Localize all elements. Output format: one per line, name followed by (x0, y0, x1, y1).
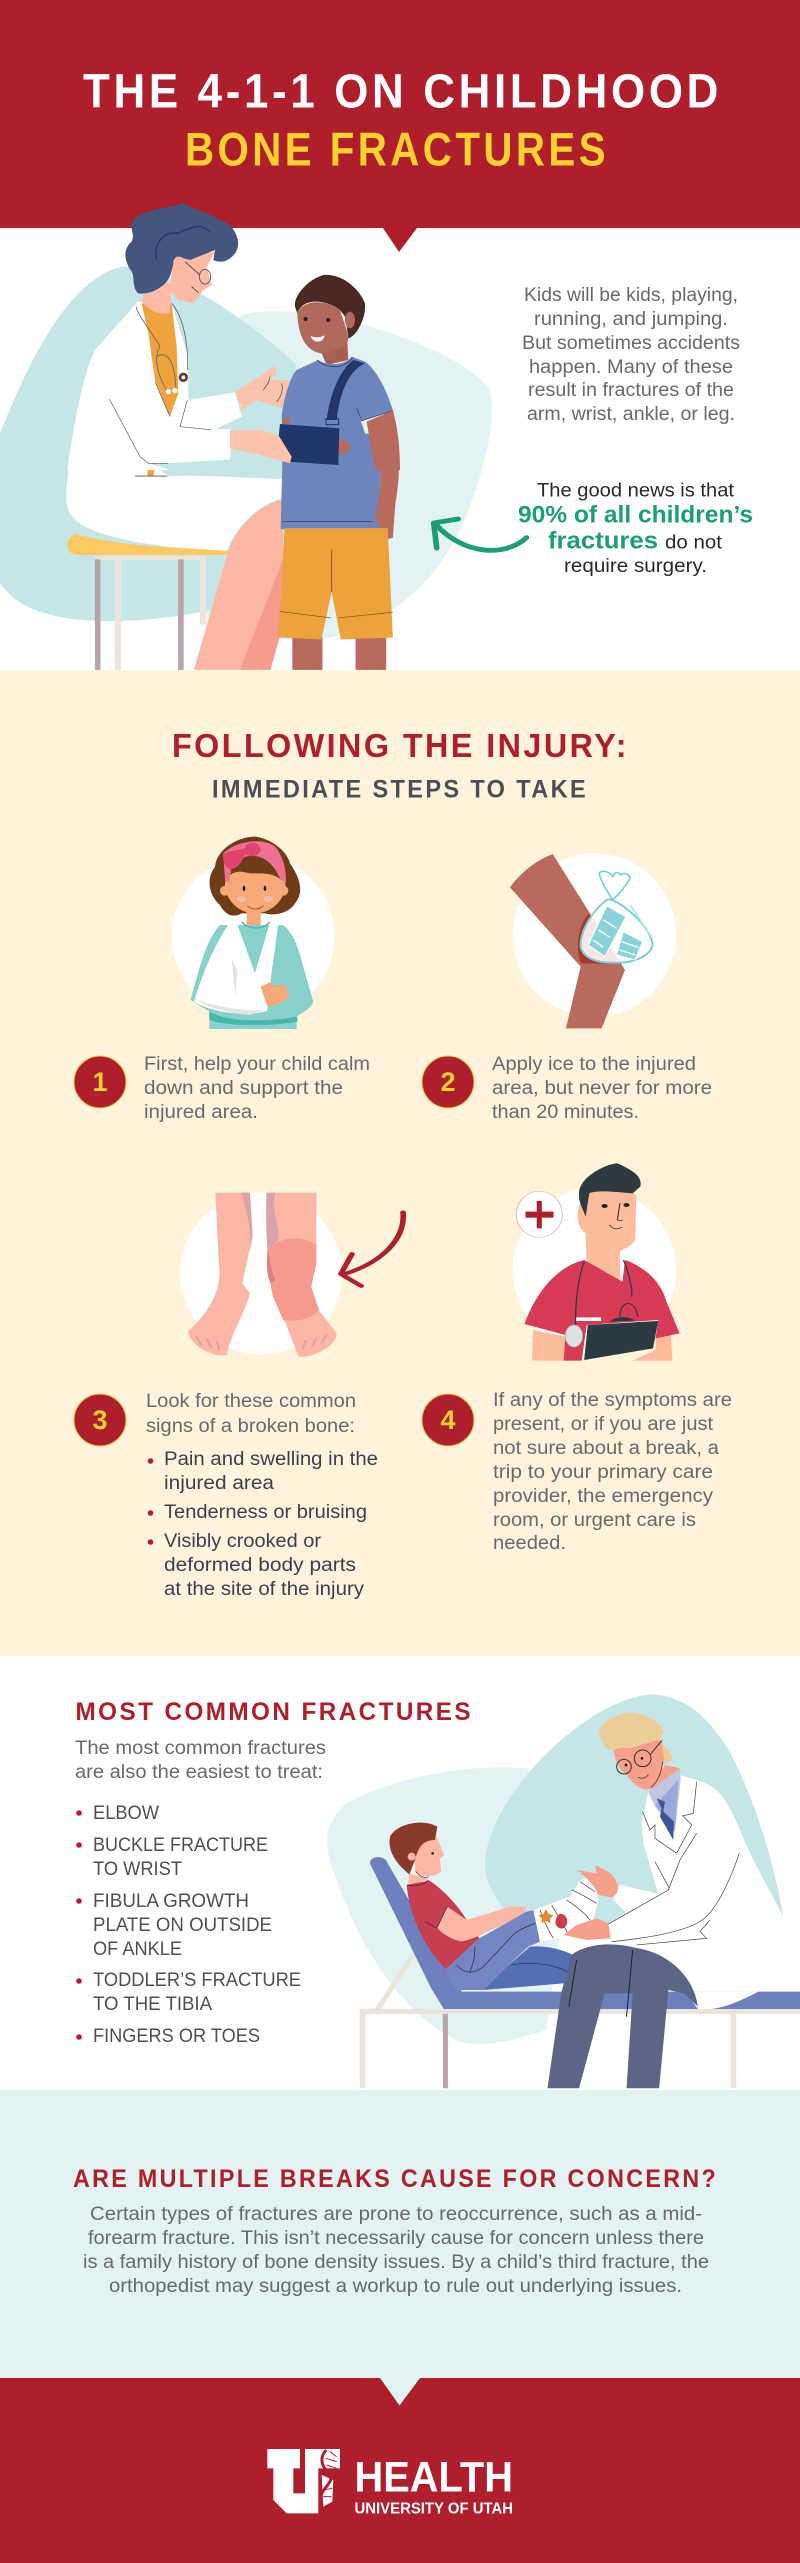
ice bag (581, 871, 653, 963)
text: multiple breaks paragraph: is a family history of bone density issues. By a child’s third fracture, the (83, 2252, 709, 2273)
step 1: down and support the (144, 1078, 343, 1099)
heading: multiple breaks: ARE MULTIPLE BREAKS CAUSE FOR CONCERN? (73, 2165, 718, 2193)
callout: 90 percent statistic (518, 480, 753, 577)
list: signs of a broken bone: Pain and swelling in the (164, 1449, 378, 1470)
illustration: ice pack on knee (510, 853, 676, 1028)
step 1 (74, 1054, 370, 1123)
list: common fractures: ELBOW (93, 1803, 159, 1824)
text block: intro paragraph: But sometimes accidents (522, 333, 740, 354)
number badge 2: 2 (440, 1067, 456, 1097)
title line 2: BONE FRACTURES (185, 122, 609, 176)
text: most common intro: are also the easiest to treat: (75, 1762, 323, 1783)
text: multiple breaks paragraph: Certain types of fractures are prone to reoccurrence, such as a mid- (90, 2204, 702, 2225)
panel: following the injury (0, 670, 800, 1656)
step 4: present, or if you are just (493, 1414, 714, 1435)
title line 1: THE 4-1-1 ON CHILDHOOD (83, 66, 722, 118)
boy lower body (278, 410, 399, 670)
number badge 2 (422, 1056, 474, 1108)
number badge 1 (74, 1056, 126, 1108)
list: common fractures: FIBULA GROWTH (93, 1891, 249, 1912)
step 2: Apply ice to the injured (492, 1054, 696, 1075)
text block: intro paragraph: happen. Many of these (529, 357, 733, 378)
text: most common intro (75, 1738, 326, 1783)
illustration: doctor examining boy with arm sling (0, 203, 527, 670)
step 4 (422, 1390, 732, 1554)
icon: block U with DNA (267, 2449, 340, 2513)
list: common fractures (76, 1803, 301, 2047)
panel: multiple breaks (0, 2090, 800, 2378)
list: signs of a broken bone: Tenderness or bruising (164, 1502, 367, 1523)
cast (533, 1875, 598, 1942)
number badge 3 (74, 1394, 126, 1446)
step 4: needed. (493, 1533, 566, 1554)
list: signs of a broken bone: injured area (164, 1473, 274, 1494)
step 4: provider, the emergency (493, 1486, 714, 1507)
arrow: green curve (434, 519, 527, 550)
step 4: If any of the symptoms are (493, 1390, 732, 1411)
number badge 4: 4 (440, 1405, 456, 1435)
doctor in white coat (563, 1712, 783, 1947)
callout: 90 percent statistic: do not (665, 532, 723, 554)
callout: 90 percent statistic: 90% of all children’s (518, 502, 753, 528)
step 3 (74, 1391, 378, 1600)
illustration: girl with arm sling (172, 837, 335, 1029)
stool (67, 534, 227, 670)
callout: 90 percent statistic: The good news is that (537, 480, 735, 502)
dark blob (485, 1694, 783, 1943)
logo: university of utah health: UNIVERSITY OF UTAH (354, 2500, 513, 2517)
doctor upper body and head (67, 203, 290, 470)
list: signs of a broken bone: at the site of the injury (164, 1579, 365, 1600)
background blobs (0, 267, 492, 640)
exam bench (360, 1857, 800, 2088)
logo: university of utah health (267, 2449, 513, 2517)
panel: most common fractures (75, 1694, 800, 2088)
number badge 1: 1 (92, 1067, 108, 1097)
step 3: Look for these common (146, 1391, 356, 1412)
list: common fractures: FINGERS OR TOES (93, 2026, 260, 2047)
subheading: immediate steps: IMMEDIATE STEPS TO TAKE (212, 776, 588, 804)
list: common fractures: OF ANKLE (93, 1939, 182, 1960)
list: common fractures: PLATE ON OUTSIDE (93, 1915, 272, 1936)
list: common fractures: TODDLER’S FRACTURE (93, 1970, 301, 1991)
text block: intro paragraph: running, and jumping. (534, 309, 728, 330)
heading: following the injury: FOLLOWING THE INJURY: (172, 727, 629, 764)
panel: footer (0, 2378, 800, 2563)
boy upper body and head (230, 275, 400, 470)
illustration: swollen ankle (181, 1192, 403, 1357)
text: most common intro: The most common fractures (75, 1738, 326, 1759)
text block: intro paragraph: arm, wrist, ankle, or leg. (527, 404, 735, 425)
list: signs of a broken bone: Visibly crooked or (164, 1531, 322, 1552)
light blob (327, 1767, 561, 2044)
list: common fractures: BUCKLE FRACTURE (93, 1835, 268, 1856)
heading: most common fractures: MOST COMMON FRACTURES (76, 1698, 473, 1726)
step 1: First, help your child calm (144, 1054, 370, 1075)
doctor trousers (547, 1944, 698, 2088)
number badge 4 (422, 1394, 474, 1446)
list: common fractures: TO WRIST (93, 1859, 182, 1880)
step 4: room, or urgent care is (493, 1510, 696, 1531)
text block: intro paragraph: result in fractures of the (528, 380, 734, 401)
illustration: nurse with clipboard (513, 1163, 680, 1361)
text: multiple breaks paragraph: orthopedist may suggest a workup to rule out underlying issues. (109, 2276, 682, 2297)
list: signs of a broken bone: deformed body parts (164, 1555, 356, 1576)
icon: medical cross (516, 1191, 562, 1237)
panel: title banner (0, 0, 800, 252)
text block: intro paragraph: Kids will be kids, playing, (524, 285, 738, 306)
callout: 90 percent statistic: require surgery. (564, 556, 707, 577)
illustration: doctor treating boy with leg cast (327, 1694, 800, 2088)
step 2: than 20 minutes. (492, 1102, 639, 1123)
text block: intro paragraph (522, 285, 740, 425)
step 4: trip to your primary care (493, 1462, 713, 1483)
list: common fractures: TO THE TIBIA (93, 1994, 212, 2015)
text: multiple breaks paragraph (83, 2204, 709, 2297)
boy patient (389, 1823, 598, 1990)
doctor body lower (66, 301, 288, 670)
number badge 3: 3 (92, 1405, 108, 1435)
step 3: signs of a broken bone: (146, 1416, 355, 1437)
list: signs of a broken bone (148, 1449, 378, 1600)
logo: university of utah health: HEALTH (354, 2454, 513, 2502)
callout: 90 percent statistic: fractures (548, 528, 658, 554)
arrow: red curve (341, 1212, 403, 1286)
text: multiple breaks paragraph: forearm fracture. This isn’t necessarily cause for concern unless there (88, 2228, 704, 2249)
step 1: injured area. (144, 1102, 258, 1123)
step 2: area, but never for more (492, 1078, 712, 1099)
step 4: not sure about a break, a (493, 1438, 719, 1459)
step 2 (422, 1054, 712, 1123)
